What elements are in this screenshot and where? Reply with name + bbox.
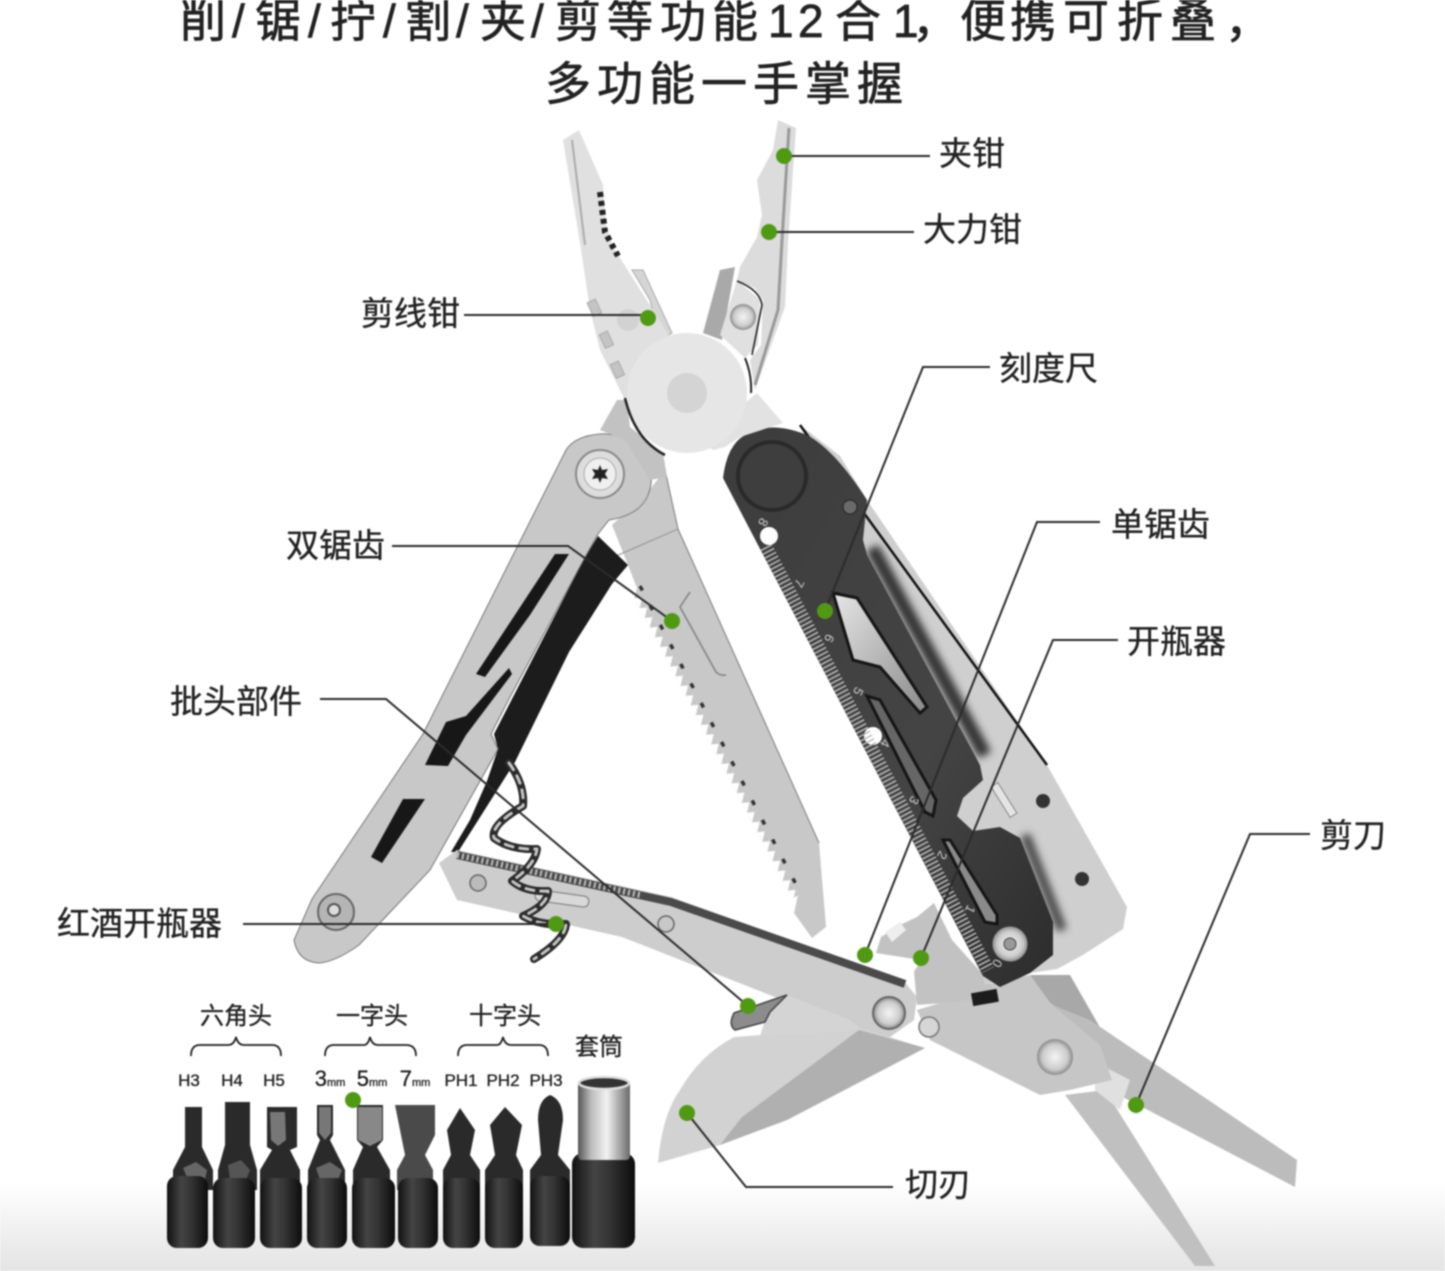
bit labels: H5 [263, 1071, 285, 1090]
ruler numbers: 0 [989, 957, 1006, 970]
bit labels: 3mm [315, 1066, 345, 1091]
callout labels: 红酒开瓶器 [57, 905, 222, 942]
scissors [917, 975, 1297, 1266]
bit holders [167, 1153, 635, 1248]
bit labels: H3 [178, 1071, 200, 1090]
callout labels: 刻度尺 [999, 350, 1098, 387]
ruler numbers [755, 516, 1006, 970]
bit labels: H4 [221, 1071, 243, 1090]
bottle opener and single serration [873, 903, 1073, 1075]
ruler numbers: 8 [755, 516, 772, 529]
bit labels: PH3 [529, 1071, 563, 1090]
callout labels: 批头部件 [170, 683, 302, 720]
ruler numbers: 4 [877, 737, 894, 750]
ruler handle [723, 425, 1127, 987]
title [180, 0, 1271, 110]
ruler numbers: 3 [906, 794, 923, 807]
ruler numbers: 1 [962, 903, 979, 916]
callout labels: 开瓶器 [1127, 623, 1226, 660]
ruler numbers: 6 [821, 632, 838, 645]
lower arm with carbon strip [439, 850, 917, 1037]
multi-tool illustration [294, 120, 1297, 1266]
callout labels: 大力钳 [923, 211, 1022, 248]
bit set [167, 1003, 635, 1248]
corkscrew [494, 763, 566, 959]
callout labels: 夹钳 [939, 135, 1005, 172]
braces [191, 1037, 548, 1056]
callout labels [57, 135, 1386, 1203]
bit labels: PH2 [486, 1071, 520, 1090]
bit labels [178, 1003, 623, 1091]
callout labels: 切刃 [905, 1166, 971, 1203]
bit labels: 5mm [357, 1066, 387, 1091]
ruler numbers: 7 [791, 577, 808, 590]
bit labels: 六角头 [200, 1003, 272, 1030]
saw blade [612, 470, 826, 938]
bit heads [173, 1095, 570, 1190]
ruler numbers: 5 [850, 685, 867, 698]
knife blade [658, 995, 925, 1163]
callout labels: 双锯齿 [286, 527, 385, 564]
bit labels: 十字头 [469, 1003, 541, 1030]
socket [578, 1077, 630, 1160]
callout labels: 剪刀 [1320, 817, 1386, 854]
callout labels: 单锯齿 [1111, 506, 1210, 543]
bit labels: 套筒 [575, 1034, 623, 1061]
title: 多功能一手掌握 [545, 58, 903, 110]
bit labels: PH1 [444, 1071, 478, 1090]
pliers [563, 120, 796, 480]
bit labels: 7mm [400, 1066, 430, 1091]
callout labels: 剪线钳 [361, 295, 460, 332]
callout leader lines [243, 156, 1310, 1187]
green callout dots [345, 148, 1144, 1121]
bit labels: 一字头 [336, 1003, 408, 1030]
left handle [294, 434, 651, 963]
ruler numbers: 2 [934, 849, 951, 862]
